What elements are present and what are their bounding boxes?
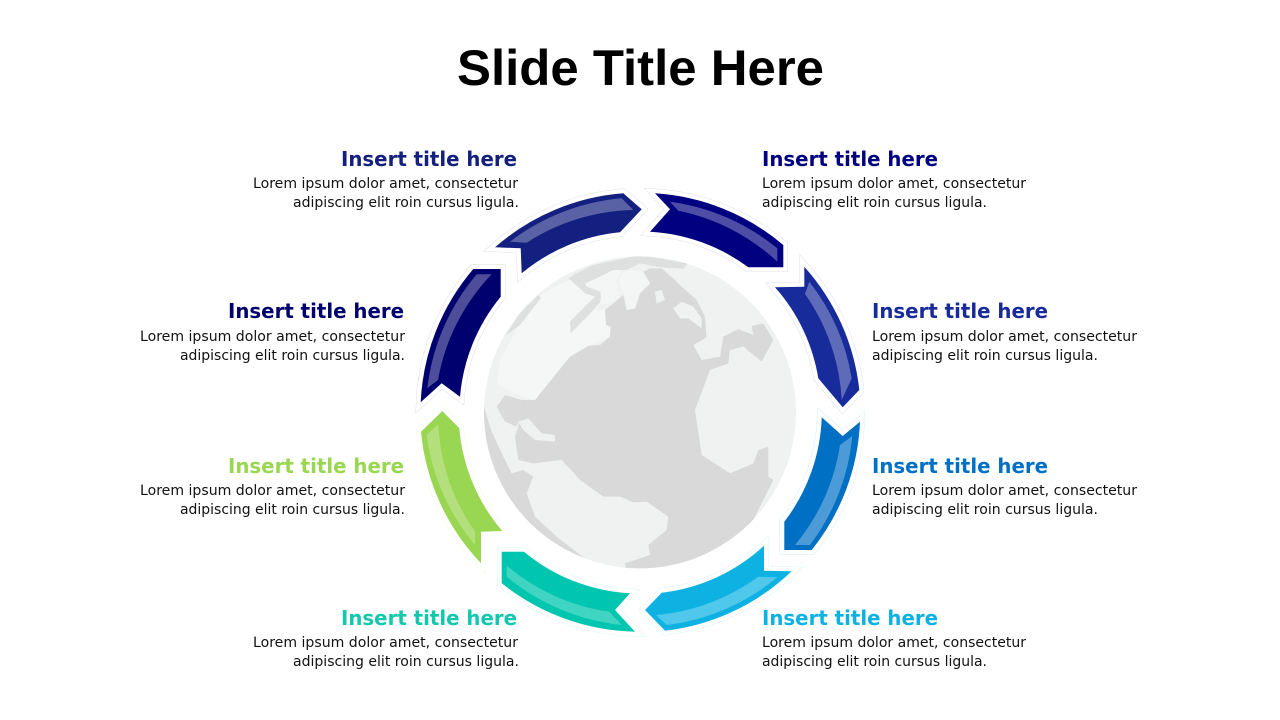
text block: top right: Lorem ipsum dolor amet, consectetur [762, 176, 1026, 192]
text block: top right [762, 147, 1026, 211]
text block: bottom right: Insert title here [762, 606, 938, 630]
text block: top left [253, 147, 519, 211]
text block: left upper: adipiscing elit roin cursus ligula. [180, 348, 405, 364]
text block: right lower: Insert title here [872, 454, 1048, 478]
text block: top left: adipiscing elit roin cursus ligula. [293, 195, 519, 211]
globe [482, 255, 796, 573]
text block: top right: Insert title here [762, 147, 938, 171]
text block: right upper: adipiscing elit roin cursus ligula. [872, 348, 1098, 364]
arrow: step 7 left upper [421, 269, 501, 402]
text block: left upper: Insert title here [228, 299, 404, 323]
text block: left lower [140, 454, 405, 518]
text block: left upper [140, 299, 405, 364]
text block: bottom right [762, 606, 1026, 670]
arrow: step 1 top right [650, 193, 783, 267]
text block: left lower: adipiscing elit roin cursus ligula. [180, 502, 405, 518]
text block: left upper: Lorem ipsum dolor amet, consectetur [140, 329, 405, 345]
text block: bottom right: Lorem ipsum dolor amet, consectetur [762, 635, 1026, 651]
arrow: step 3 right lower [784, 417, 860, 550]
text block: top right: adipiscing elit roin cursus ligula. [762, 195, 987, 211]
arrow: step 6 left lower [421, 411, 502, 563]
text block: bottom right: adipiscing elit roin cursus ligula. [762, 654, 987, 670]
text block: left lower: Insert title here [228, 454, 404, 478]
text block: bottom left [253, 606, 519, 670]
text block: right lower [872, 454, 1137, 518]
arrow: step 4 bottom right [645, 546, 792, 631]
text block: left lower: Lorem ipsum dolor amet, consectetur [140, 483, 405, 499]
text block: right upper: Insert title here [872, 299, 1048, 323]
text block: top left: Lorem ipsum dolor amet, consectetur [253, 176, 518, 192]
text block: right lower: adipiscing elit roin cursus ligula. [872, 502, 1098, 518]
text block: bottom left: Insert title here [341, 606, 517, 630]
title: Slide Title Here [457, 40, 824, 96]
text block: right lower: Lorem ipsum dolor amet, consectetur [872, 483, 1137, 499]
text block: right upper [872, 299, 1137, 364]
arrow: step 2 right upper [775, 267, 859, 407]
text block: bottom left: Lorem ipsum dolor amet, consectetur [253, 635, 518, 651]
arrow: step 5 bottom left [502, 552, 635, 632]
text block: right upper: Lorem ipsum dolor amet, consectetur [872, 329, 1137, 345]
text block: top left: Insert title here [341, 147, 517, 171]
arrow: step 8 top left [495, 193, 642, 273]
text block: bottom left: adipiscing elit roin cursus ligula. [293, 654, 519, 670]
